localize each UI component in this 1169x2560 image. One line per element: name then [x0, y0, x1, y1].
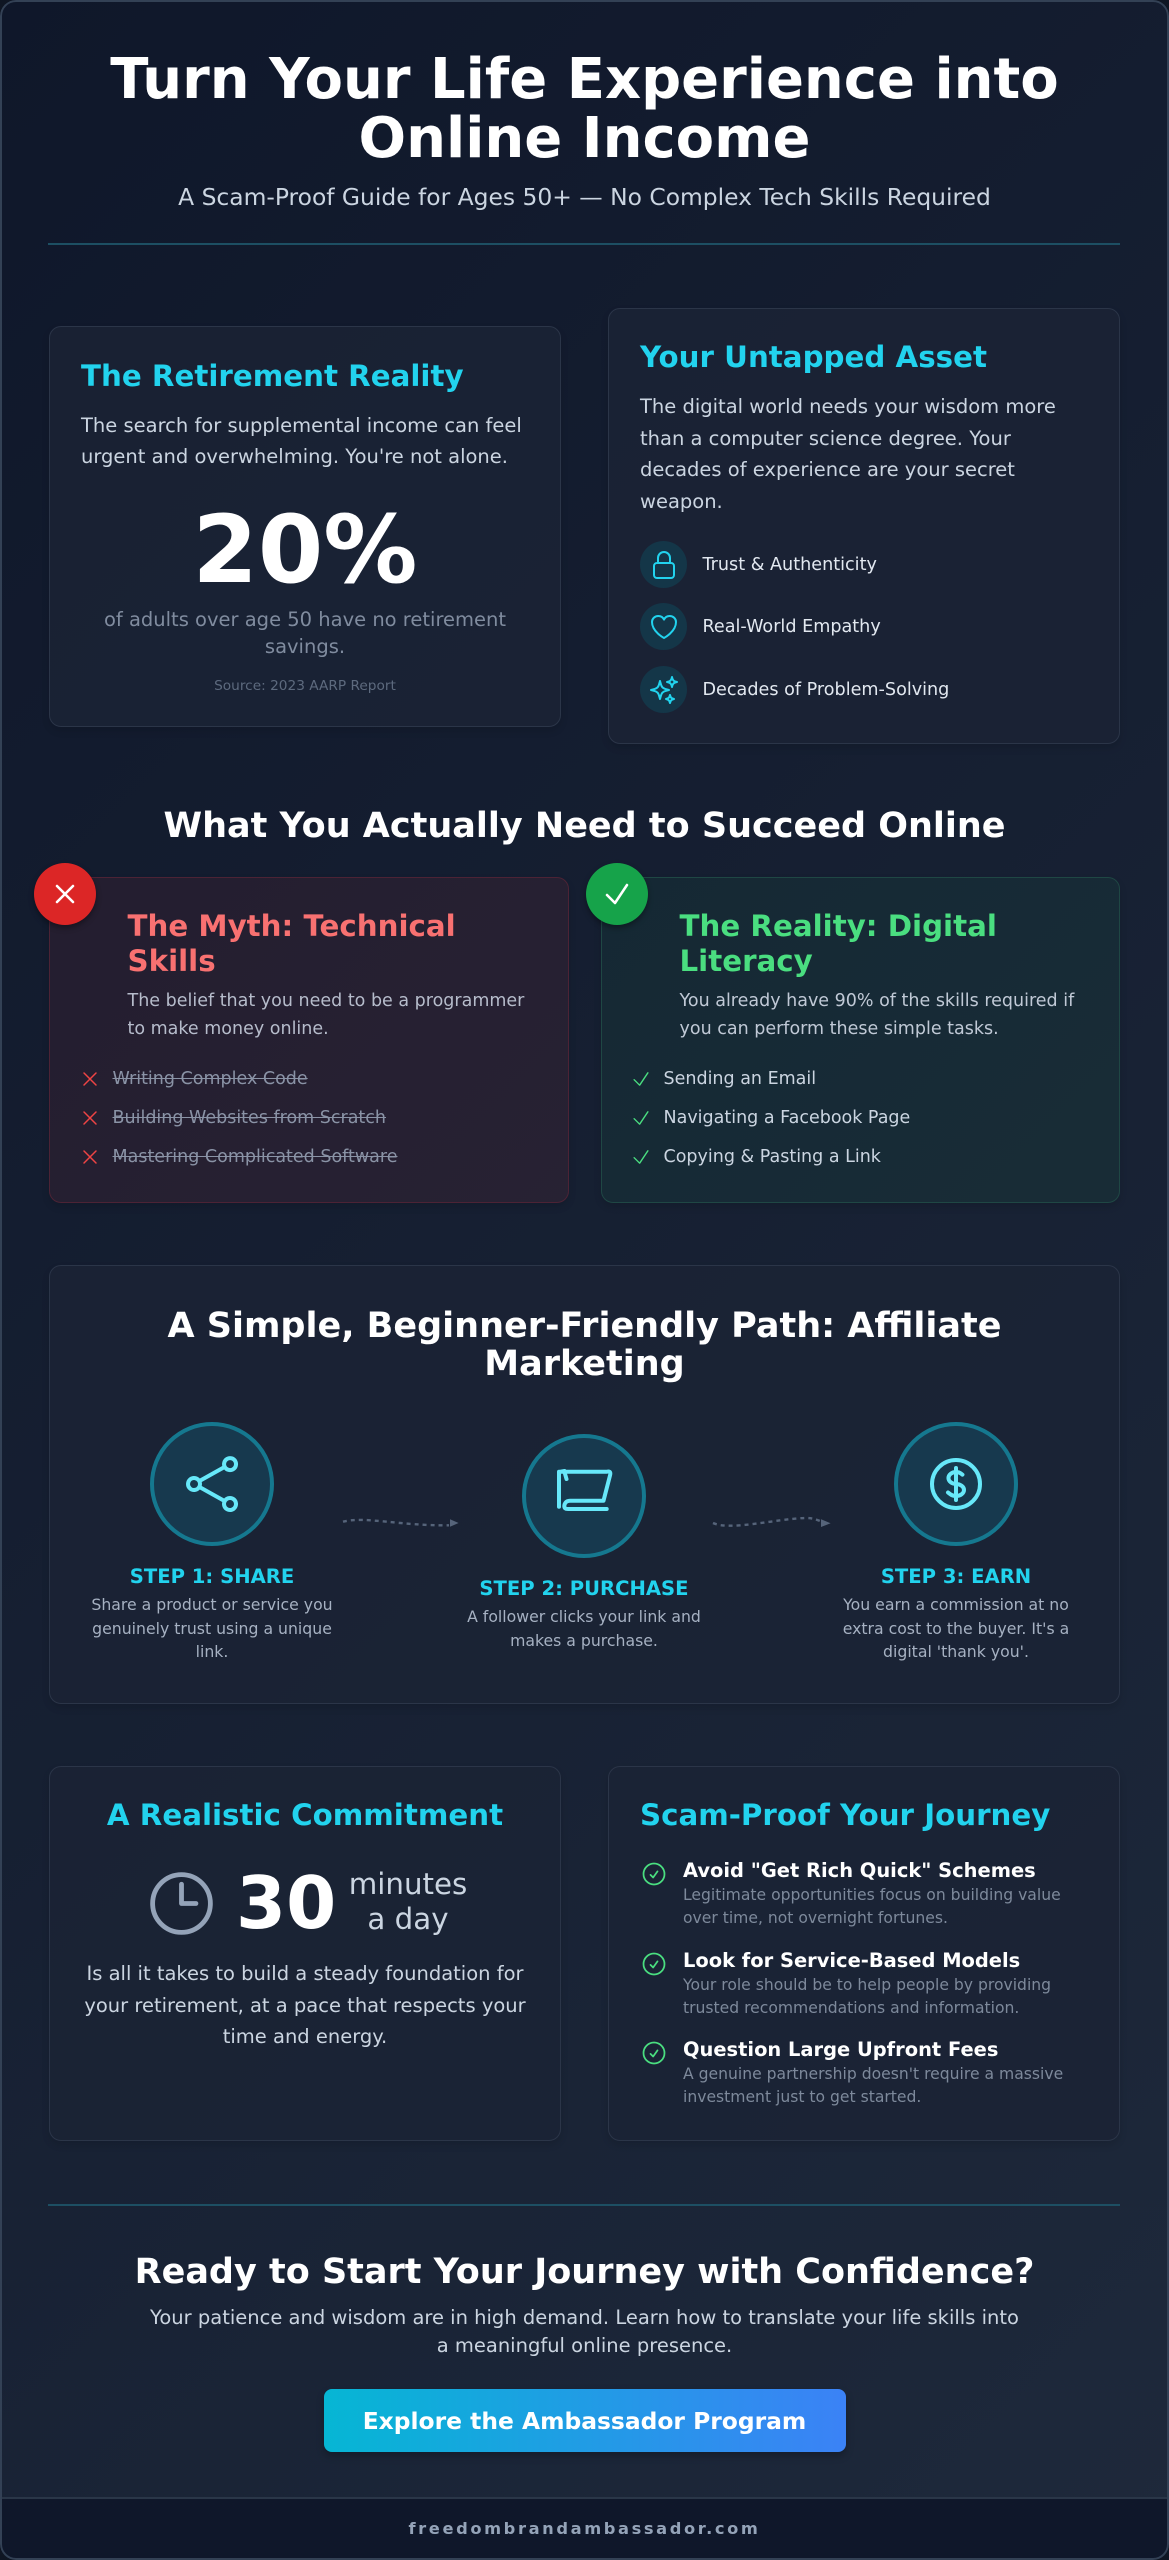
- stat unit: a day: [367, 1902, 449, 1936]
- stat unit: minutes: [349, 1867, 467, 1901]
- tip: service-based models: [642, 1949, 1051, 2017]
- panel: the reality: [600, 877, 1120, 1202]
- source note: Source: 2023 AARP Report: [214, 678, 396, 694]
- path heading: A Simple, Beginner-Friendly Path: Affiliate: [167, 1306, 1002, 1346]
- tip: upfront fees: Question Large Upfront Fees: [683, 2038, 998, 2061]
- button: Explore the Ambassador Program: [363, 2407, 806, 2435]
- step 1: share: Share a product or service you: [91, 1595, 333, 1614]
- panel: affiliate marketing path: [49, 1265, 1120, 1704]
- asset: trust: Trust & Authenticity: [702, 555, 877, 575]
- header: [110, 47, 1059, 211]
- stat: 20%: 20%: [192, 496, 418, 605]
- panel: scam-proof journey: [608, 1766, 1120, 2141]
- badge: red x: [34, 863, 96, 925]
- step 3: earn: extra cost to the buyer. It's a: [843, 1618, 1069, 1638]
- stat: 30: 30: [236, 1861, 336, 1945]
- asset text: The digital world needs your wisdom more: [640, 395, 1056, 418]
- icon: lock: [653, 551, 675, 579]
- step 1: share: link.: [196, 1642, 228, 1661]
- reality text: you can perform these simple tasks.: [680, 1018, 999, 1038]
- reality list: Copying & Pasting a Link: [664, 1147, 881, 1167]
- heading: retirement reality: The Retirement Reality: [81, 359, 464, 393]
- cta text: Your patience and wisdom are in high demand. Learn how to translate your life skills into: [150, 2306, 1019, 2329]
- step 1: share: [91, 1422, 333, 1661]
- myth list: Writing Complex Code: [112, 1069, 308, 1089]
- reality text: [680, 991, 1075, 1038]
- step 2: purchase: makes a purchase.: [510, 1630, 658, 1650]
- tip: service-based models: trusted recommendations and information.: [683, 1999, 1019, 2017]
- asset: trust: [640, 541, 877, 588]
- title: Online Income: [359, 106, 810, 171]
- arrow: step 1 to step 2: [342, 1518, 458, 1527]
- stat caption: of adults over age 50 have no retirement: [104, 608, 506, 631]
- commitment text: time and energy.: [223, 2025, 387, 2048]
- myth heading: [128, 909, 456, 978]
- step 3: earn: [843, 1422, 1069, 1661]
- step 1: share: STEP 1: SHARE: [130, 1565, 294, 1588]
- title: [110, 47, 1059, 171]
- tip: get rich quick: Avoid "Get Rich Quick" Schemes: [683, 1859, 1036, 1882]
- step 3: earn: STEP 3: EARN: [881, 1565, 1031, 1588]
- path heading: [167, 1306, 1002, 1384]
- cta text: [150, 2306, 1019, 2357]
- icon: sparkles: [650, 676, 678, 704]
- button: [324, 2389, 846, 2452]
- panel: the retirement reality: [49, 326, 561, 727]
- tip: upfront fees: investment just to get started.: [683, 2088, 921, 2106]
- myth text: to make money online.: [128, 1018, 329, 1038]
- path heading: Marketing: [484, 1344, 685, 1384]
- asset text: decades of experience are your secret: [640, 458, 1015, 481]
- step 2: purchase: [467, 1434, 701, 1650]
- reality heading: The Reality: Digital: [680, 909, 997, 943]
- commitment heading: A Realistic Commitment: [107, 1798, 503, 1832]
- tip: service-based models: Your role should be to help people by providing: [683, 1976, 1051, 1994]
- tip: upfront fees: [642, 2038, 1063, 2106]
- panel: the myth: [49, 877, 569, 1202]
- asset: empathy: [640, 603, 881, 650]
- myth text: The belief that you need to be a programmer: [128, 991, 524, 1011]
- reality list: [633, 1069, 910, 1167]
- reality heading: Literacy: [680, 944, 813, 978]
- icon: dollar: [930, 1458, 982, 1510]
- asset text: than a computer science degree. Your: [640, 427, 1011, 450]
- panel: realistic commitment: [49, 1766, 561, 2141]
- asset text: [640, 395, 1056, 513]
- tip: get rich quick: [642, 1859, 1061, 1927]
- footer: [0, 2497, 1169, 2560]
- stat caption: savings.: [265, 635, 345, 658]
- intro text: [80, 414, 522, 468]
- myth heading: The Myth: Technical: [128, 909, 456, 943]
- intro text: The search for supplemental income can feel: [81, 414, 522, 437]
- myth list: Mastering Complicated Software: [112, 1147, 397, 1167]
- reality text: You already have 90% of the skills required if: [680, 991, 1074, 1011]
- commitment text: [84, 1962, 526, 2048]
- asset text: weapon.: [640, 490, 723, 513]
- tip: get rich quick: Legitimate opportunities focus on building value: [683, 1886, 1061, 1904]
- step 3: earn: You earn a commission at no: [843, 1595, 1069, 1614]
- tip: get rich quick: over time, not overnight fortunes.: [683, 1909, 948, 1927]
- reality list: Sending an Email: [664, 1069, 816, 1089]
- myth heading: Skills: [128, 944, 216, 978]
- icon: clock: [150, 1872, 213, 1935]
- reality heading: [680, 909, 997, 978]
- heading: untapped asset: Your Untapped Asset: [640, 340, 987, 374]
- scam-proof heading: Scam-Proof Your Journey: [640, 1798, 1050, 1832]
- subtitle: A Scam-Proof Guide for Ages 50+ — No Complex Tech Skills Required: [178, 183, 991, 211]
- stat caption: [104, 608, 506, 658]
- tip: service-based models: Look for Service-Based Models: [683, 1949, 1020, 1972]
- step 2: purchase: STEP 2: PURCHASE: [479, 1577, 689, 1600]
- asset: empathy: Real-World Empathy: [702, 617, 881, 637]
- call to action: [135, 2252, 1034, 2456]
- asset: problem-solving: [640, 666, 949, 713]
- icon: share: [186, 1456, 238, 1512]
- cta text: a meaningful online presence.: [437, 2334, 732, 2357]
- step 3: earn: digital 'thank you'.: [883, 1642, 1029, 1661]
- stat unit: [349, 1867, 467, 1936]
- icon: heart: [651, 615, 677, 639]
- commitment text: your retirement, at a pace that respects your: [84, 1994, 526, 2016]
- section heading: what you need: What You Actually Need to Succeed Online: [163, 806, 1006, 846]
- icon: purchase: [557, 1469, 612, 1511]
- commitment text: Is all it takes to build a steady foundation for: [86, 1962, 524, 1985]
- step 1: share: genuinely trust using a unique: [92, 1618, 332, 1638]
- step 2: purchase: A follower clicks your link and: [467, 1607, 701, 1626]
- title: Turn Your Life Experience into: [110, 47, 1059, 112]
- intro text: urgent and overwhelming. You're not alone.: [81, 445, 508, 468]
- myth text: [127, 991, 524, 1038]
- footer: freedombrandambassador.com: [408, 2519, 760, 2538]
- panel: your untapped asset: [608, 308, 1120, 744]
- tip: upfront fees: A genuine partnership doesn't require a massive: [683, 2065, 1063, 2083]
- cta heading: Ready to Start Your Journey with Confidence?: [135, 2252, 1034, 2292]
- asset: problem-solving: Decades of Problem-Solving: [702, 680, 949, 700]
- arrow: step 2 to step 3: [712, 1516, 830, 1527]
- badge: green check: [586, 863, 648, 925]
- myth list: Building Websites from Scratch: [112, 1108, 386, 1128]
- myth list: [83, 1069, 398, 1167]
- reality list: Navigating a Facebook Page: [664, 1108, 910, 1128]
